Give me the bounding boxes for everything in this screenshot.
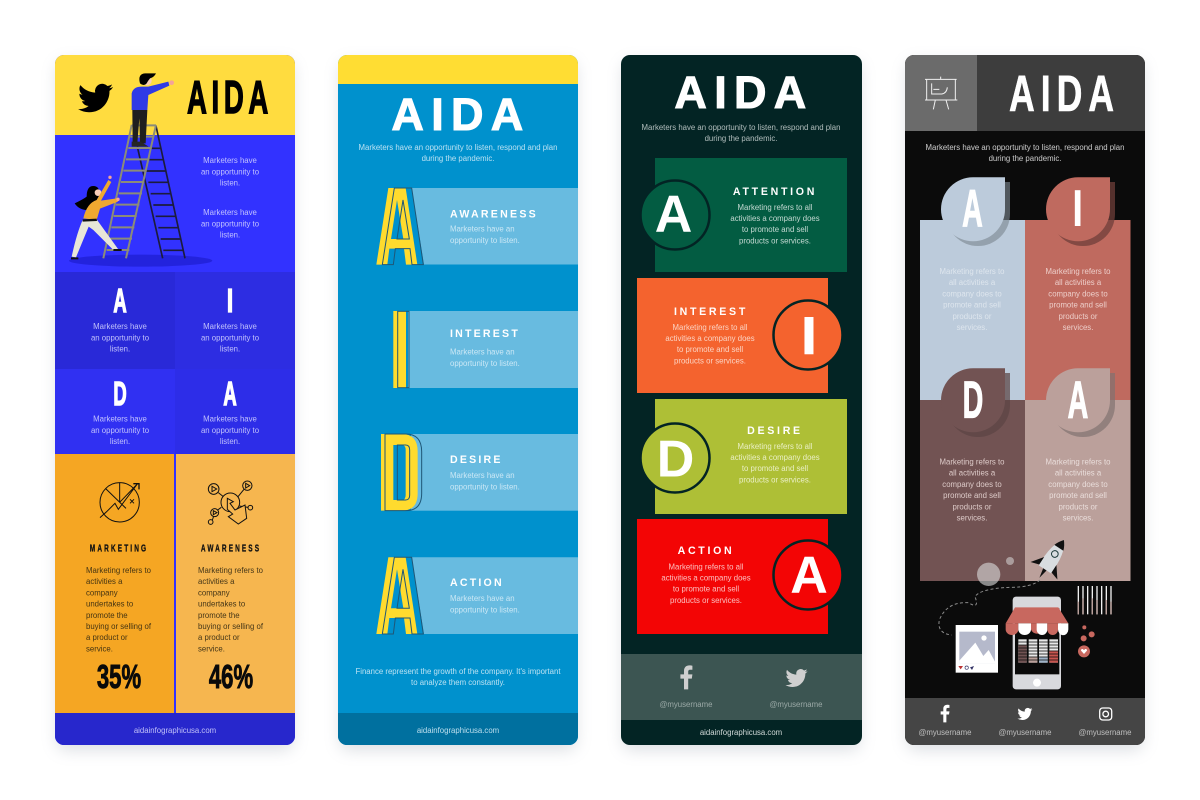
text: all activities a (949, 278, 996, 287)
text: services. (1063, 323, 1093, 332)
row: interest (637, 278, 842, 393)
text: Marketing refers to (940, 458, 1004, 466)
header (905, 55, 1145, 131)
icon: marketing chart (100, 483, 139, 522)
footer: aidainfographicusa.com (417, 726, 499, 735)
text: to promote and sell (742, 225, 808, 234)
tile: I (1025, 177, 1130, 400)
text: Marketing refers to (1046, 267, 1110, 276)
row: desire (640, 399, 847, 514)
panel: dark green AIDA infographic (621, 55, 862, 745)
circle letter A: A (655, 186, 692, 244)
number: 35%: 35% (97, 658, 141, 696)
heading: awareness: AWARENESS (201, 542, 261, 554)
header strip (338, 55, 578, 84)
text: awareness description: buying or selling of (198, 622, 264, 631)
heading: AWARENESS (450, 208, 538, 220)
text: products or services. (674, 356, 746, 365)
icon: twitter (1018, 708, 1032, 720)
footer (55, 713, 295, 745)
text: subtitle: Marketers have an opportunity to listen, respond and plan (359, 143, 557, 152)
text: intro blurbs: listen. (220, 178, 240, 188)
illustration: people on a ladder (69, 73, 212, 267)
text: services. (957, 514, 987, 522)
tile: D (920, 368, 1025, 581)
circle letter I: I (802, 307, 816, 365)
text: promote and sell (1049, 491, 1107, 500)
row: action (376, 557, 578, 634)
text: marketing description: promote the (86, 611, 128, 620)
text: opportunity to listen. (450, 236, 520, 245)
grid cell A: an opportunity to (91, 333, 150, 342)
text: opportunity to listen. (450, 605, 520, 614)
text: intro blurbs: listen. (220, 230, 240, 240)
circle letter A (640, 180, 710, 250)
grid cell I: listen. (220, 344, 240, 354)
grid cell A: Marketers have (93, 322, 147, 331)
text: awareness description: a product or (198, 633, 240, 642)
text: products or (952, 312, 992, 321)
text: Marketers have an (450, 348, 515, 357)
circle letter D: D (657, 430, 694, 488)
text: products or services. (739, 236, 811, 245)
text: marketing description: activities a (86, 577, 123, 586)
text: subtitle: during the pandemic. (989, 154, 1061, 163)
icon: twitter bird (78, 84, 113, 112)
title: AIDA (674, 67, 814, 118)
panel: yellow and blue AIDA infographic (55, 55, 295, 745)
grid cell D: an opportunity to (91, 426, 150, 435)
text: awareness description: Marketing refers to (198, 566, 263, 575)
circle letter A: A (790, 547, 828, 605)
text: awareness description: company (198, 588, 230, 597)
heading: marketing: MARKETING (90, 542, 148, 554)
text: subtitle: during the pandemic. (422, 154, 494, 163)
text: activities a company does (665, 334, 755, 343)
grid cell A second: an opportunity to (201, 426, 260, 435)
grid cell I: Marketers have (203, 322, 257, 331)
text: Marketers have an (450, 224, 515, 234)
text: company does to (942, 289, 1002, 298)
text: products or services. (739, 475, 811, 484)
text: to promote and sell (742, 464, 808, 473)
text: intro blurbs: an opportunity to (201, 219, 260, 228)
text: services. (957, 323, 987, 332)
text: subtitle: during the pandemic. (705, 134, 777, 143)
grid cell A second: listen. (220, 437, 240, 446)
footer text: aidainfographicusa.com (700, 728, 782, 737)
panel: awareness stat (176, 454, 295, 713)
text: all activities a (949, 469, 996, 478)
footer: aidainfographicusa.com (134, 726, 216, 735)
title: AIDA (187, 73, 273, 124)
text: Marketing refers to (940, 267, 1004, 276)
icon: twitter (786, 669, 808, 687)
text: all activities a (1055, 469, 1102, 478)
letter A: A (962, 179, 983, 237)
tile: A second (1025, 368, 1130, 581)
heading: ACTION (450, 577, 504, 589)
text: awareness description: undertakes to (198, 600, 246, 609)
panel: black AIDA infographic (905, 55, 1145, 745)
title: AIDA (1009, 66, 1120, 123)
text: products or services. (670, 596, 742, 605)
panel: blue AIDA infographic (338, 55, 578, 745)
letter A (376, 188, 423, 265)
text: company does to (1048, 289, 1108, 298)
text: Marketing refers to (1046, 458, 1110, 466)
grid cell D (91, 381, 149, 444)
text: Marketing refers to all (738, 203, 812, 212)
text: Marketing refers to all (669, 562, 743, 572)
text: opportunity to listen. (450, 482, 520, 491)
number: 46%: 46% (209, 658, 253, 696)
text: marketing description: company (86, 588, 118, 597)
icon: instagram (1100, 708, 1112, 720)
text: awareness description: promote the (198, 611, 240, 620)
grid cell A: A (113, 282, 127, 319)
illustration: rocket, shop phone and social cards (939, 531, 1112, 689)
icon: facebook (941, 705, 949, 722)
grid cell A (91, 288, 149, 352)
text: to promote and sell (673, 585, 739, 594)
circle letter D (640, 424, 710, 492)
text: intro blurbs: Marketers have (203, 156, 257, 165)
handles: @myusername (770, 700, 822, 709)
text: services. (1063, 514, 1093, 522)
letter A: A (1068, 371, 1088, 429)
icon: awareness network (208, 481, 253, 524)
heading: DESIRE (747, 425, 803, 437)
text: subtitle: Marketers have an opportunity to listen, respond and plan (926, 143, 1124, 152)
social band (905, 698, 1145, 745)
icon: facebook (680, 665, 692, 689)
text: Marketing refers to all (673, 323, 747, 332)
text: activities a company does (661, 574, 751, 583)
circle letter A (774, 540, 842, 610)
text: all activities a (1055, 278, 1102, 287)
grid cell I: an opportunity to (201, 333, 260, 342)
text: subtitle: Marketers have an opportunity to listen, respond and plan (642, 123, 840, 132)
AIDA grid (55, 272, 295, 454)
footer (338, 713, 578, 745)
text: company does to (942, 480, 1002, 489)
text: marketing description: a product or (86, 633, 128, 642)
grid cell A: listen. (110, 344, 130, 354)
handles: @myusername (1079, 728, 1131, 737)
grid cell I (201, 288, 259, 352)
text: promote and sell (943, 491, 1001, 500)
grid cell A second: A (223, 375, 237, 412)
letter A (376, 557, 423, 634)
text: marketing description: undertakes to (86, 600, 134, 609)
text: marketing description: service. (86, 644, 113, 653)
handles: @myusername (919, 728, 971, 737)
grid cell A second: Marketers have (203, 414, 257, 424)
header band (55, 55, 295, 135)
text: awareness description: activities a (198, 577, 235, 586)
title: AIDA (391, 89, 531, 140)
circle letter I (774, 300, 842, 370)
text: intro blurbs: an opportunity to (201, 167, 260, 176)
text: opportunity to listen. (450, 359, 520, 368)
text: intro blurbs (201, 156, 260, 240)
heading: DESIRE (450, 454, 503, 466)
heading: ACTION (678, 545, 734, 557)
text: promote and sell (1049, 301, 1107, 310)
text: activities a company does (730, 214, 820, 223)
text: activities a company does (730, 453, 820, 462)
row: action (637, 519, 842, 634)
grid cell D: listen. (110, 437, 130, 446)
social band (621, 654, 862, 720)
row: attention (640, 158, 847, 272)
handles: @myusername (999, 728, 1051, 737)
text: closing note: Finance represent the growth of the company. It's important (355, 667, 561, 676)
text: products or (1058, 312, 1098, 321)
text: Marketers have an (450, 471, 515, 480)
text: to promote and sell (677, 345, 743, 354)
text: Marketing refers to all (738, 442, 812, 451)
grid cell A second (201, 381, 259, 444)
handles: @myusername (660, 700, 712, 709)
text: Marketers have an (450, 594, 515, 603)
text: closing note: to analyze them constantly. (411, 678, 505, 687)
row: desire (381, 434, 578, 511)
text: company does to (1048, 480, 1108, 489)
text: promote and sell (943, 301, 1001, 310)
letter I: I (1072, 178, 1083, 237)
row: awareness (376, 188, 578, 265)
text: marketing description: buying or selling of (86, 622, 152, 631)
panel: marketing stat (55, 454, 174, 713)
letter D: D (963, 370, 983, 428)
text: products or (952, 502, 992, 511)
grid cell D: D (113, 375, 127, 412)
grid cell D: Marketers have (93, 414, 147, 424)
letter I (393, 311, 409, 388)
text: products or (1058, 502, 1098, 511)
heading: INTEREST (450, 328, 520, 340)
text: marketing description: Marketing refers to (86, 566, 151, 575)
letter D (381, 434, 422, 511)
grid cell I: I (227, 283, 233, 320)
text: intro blurbs: Marketers have (203, 208, 257, 217)
text: awareness description: service. (198, 644, 225, 653)
heading: INTEREST (674, 306, 748, 318)
tile: A (920, 177, 1025, 400)
icon: presentation board (925, 77, 957, 109)
heading: ATTENTION (733, 186, 817, 198)
row: interest (393, 311, 578, 388)
